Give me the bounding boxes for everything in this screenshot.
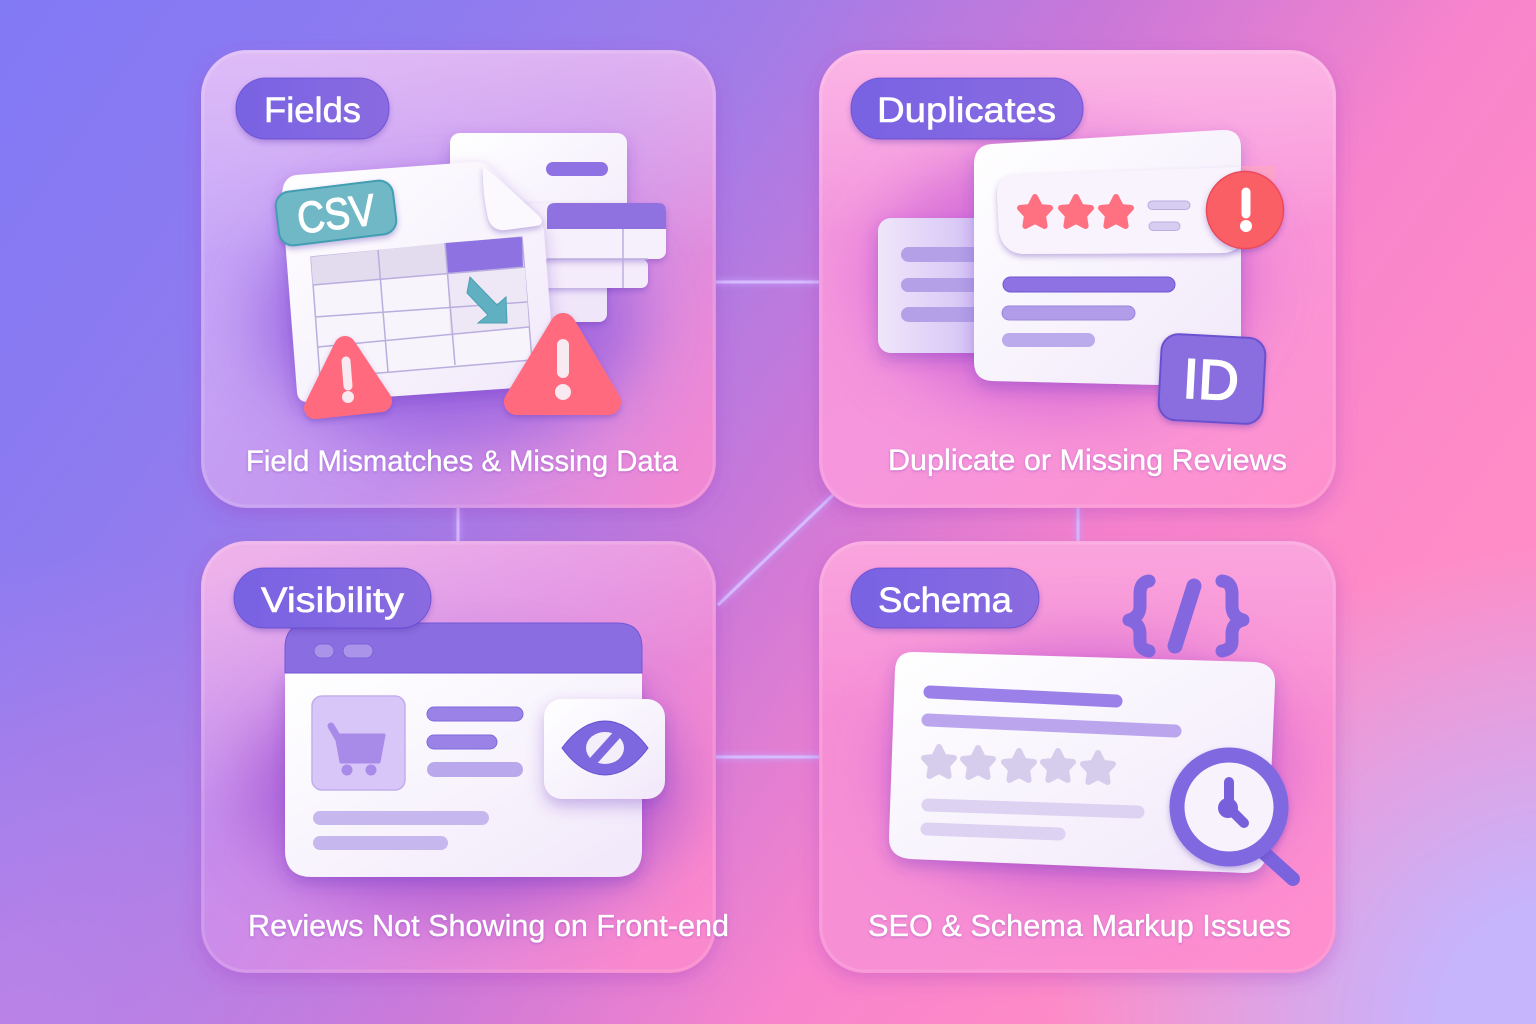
icon: magnifier with clock xyxy=(1177,755,1293,879)
icon: hidden eye xyxy=(544,699,665,799)
schema review card xyxy=(889,652,1275,873)
faint tag behind alert xyxy=(1241,166,1276,200)
main review card xyxy=(974,130,1241,387)
back review card xyxy=(878,218,1018,353)
badge: ID xyxy=(1158,333,1266,425)
caption: schema: SEO & Schema Markup Issues xyxy=(868,908,1291,943)
icon: shopping cart xyxy=(312,696,405,790)
connector lines xyxy=(458,282,1078,757)
heading pill: Schema xyxy=(851,568,1039,628)
data table xyxy=(311,237,532,378)
caption: fields: Field Mismatches & Missing Data xyxy=(246,445,678,478)
icon: teal arrow xyxy=(467,277,507,323)
badge: CSV xyxy=(274,179,398,247)
illustration: duplicated review cards xyxy=(878,130,1284,425)
browser window xyxy=(285,623,642,877)
badge: ID: ID xyxy=(1181,347,1241,412)
heading pill: Visibility: Visibility xyxy=(261,581,405,620)
panel: fields xyxy=(201,50,716,508)
illustration: spreadsheet with warnings xyxy=(274,133,666,408)
back sheet xyxy=(450,133,666,322)
panel: visibility xyxy=(201,541,729,973)
badge: CSV: CSV xyxy=(294,185,378,244)
heading pill: Duplicates xyxy=(851,78,1083,139)
heading pill: Schema: Schema xyxy=(878,581,1013,620)
heading pill: Visibility xyxy=(234,568,431,628)
panel: duplicates xyxy=(819,50,1336,508)
icon: large warning triangle xyxy=(517,326,608,402)
caption: duplicates: Duplicate or Missing Reviews xyxy=(888,444,1287,477)
heading pill: Fields: Fields xyxy=(264,91,361,130)
rating stars xyxy=(924,747,1113,782)
icon: code braces xyxy=(1129,581,1243,651)
heading pill: Fields xyxy=(236,78,389,139)
icon: small warning triangle xyxy=(315,347,381,408)
caption: visibility: Reviews Not Showing on Front-end xyxy=(248,908,729,943)
heading pill: Duplicates: Duplicates xyxy=(877,91,1056,130)
panel: schema xyxy=(819,541,1336,973)
rating card xyxy=(997,167,1240,254)
icon: red alert circle xyxy=(1206,172,1284,248)
main CSV sheet xyxy=(282,162,555,402)
